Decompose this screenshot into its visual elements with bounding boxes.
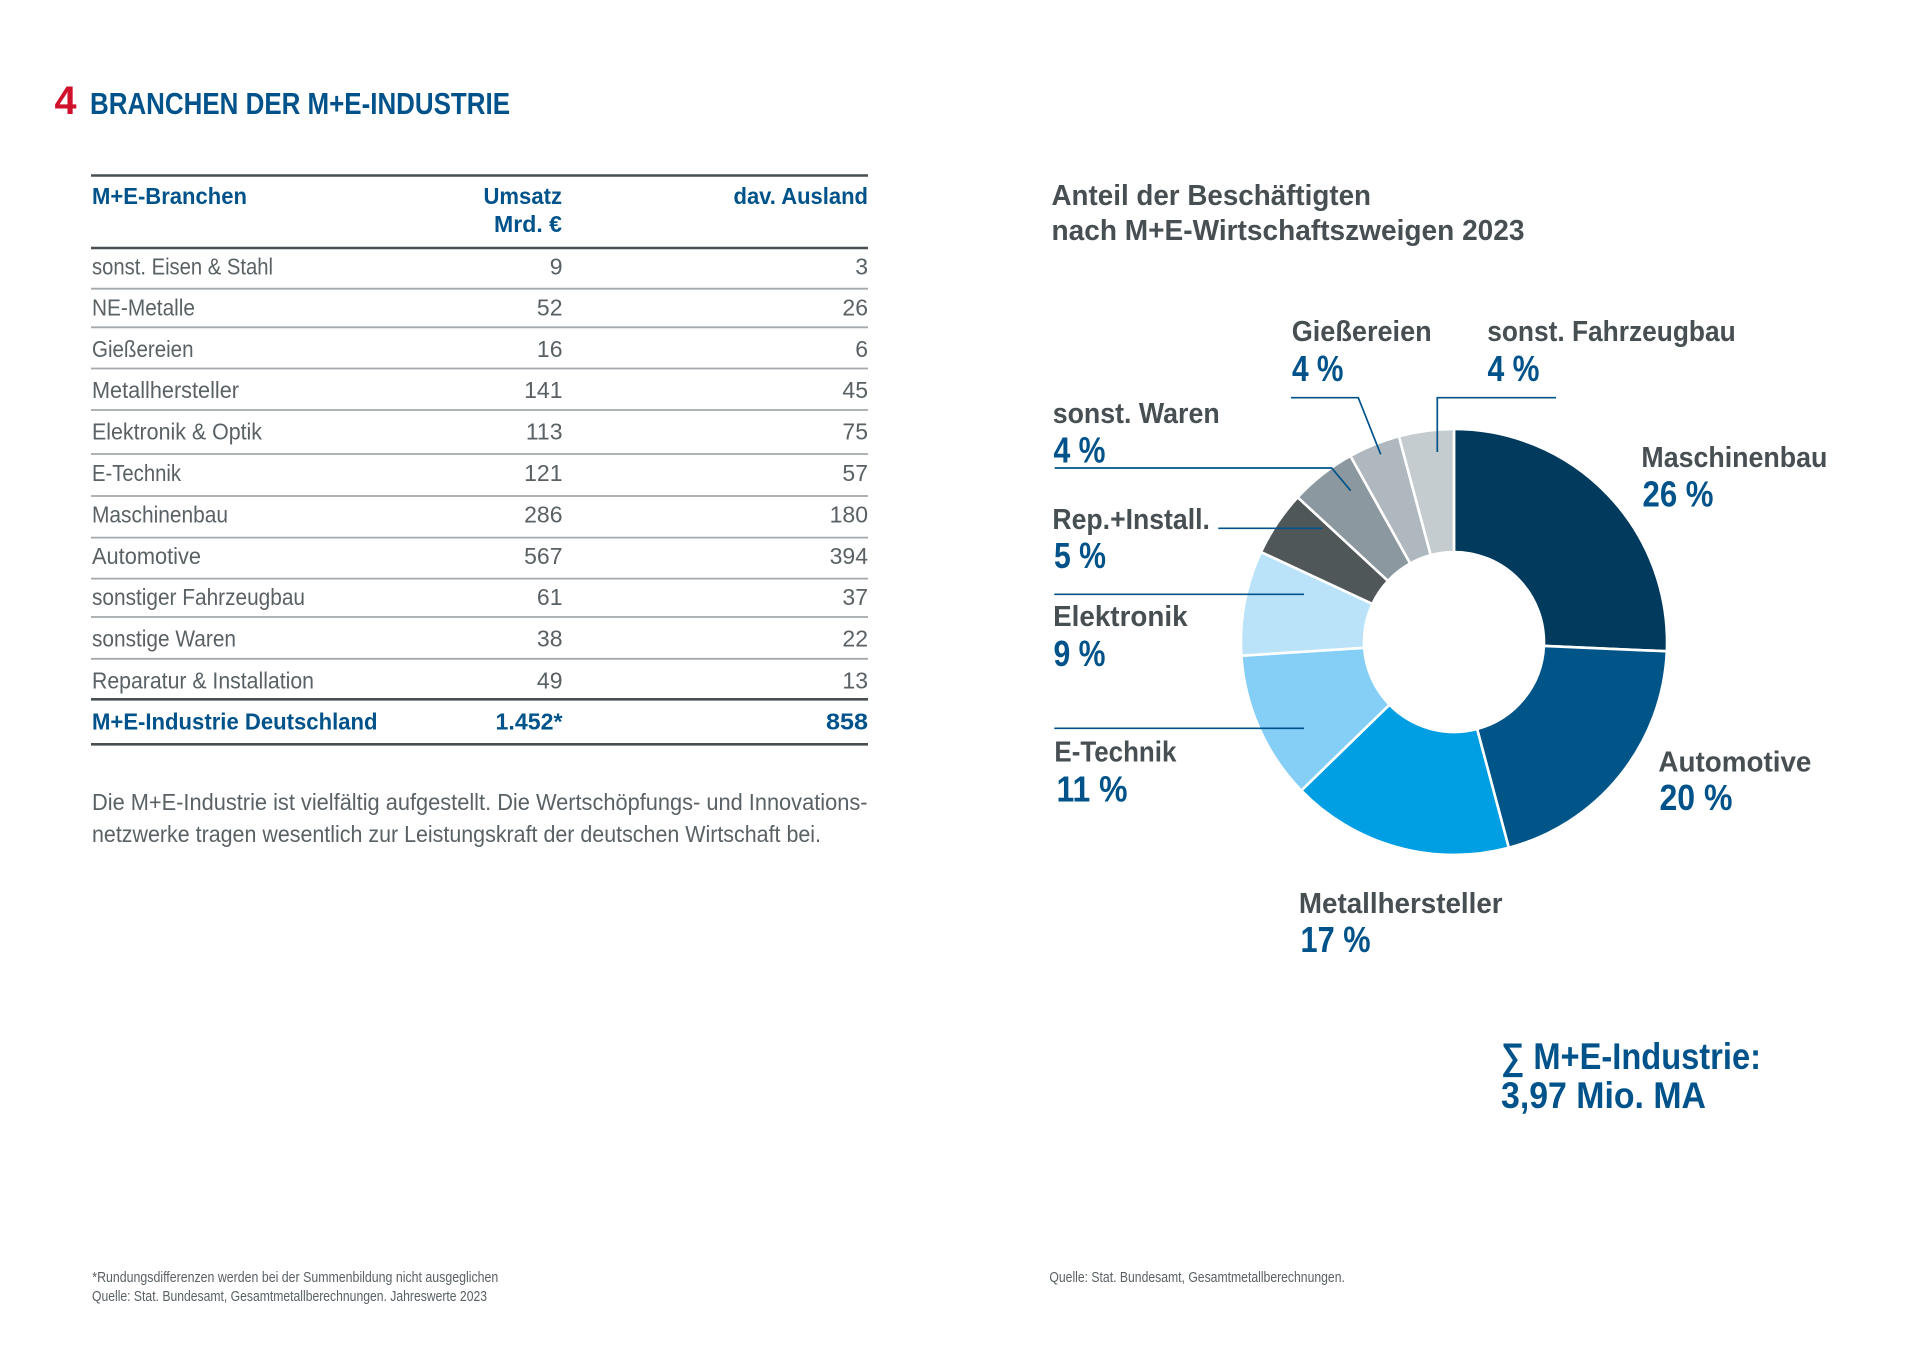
- label: sonst. Waren: 4 %: [1054, 429, 1106, 470]
- label: Metallhersteller: Metallhersteller: [1299, 888, 1503, 920]
- label: sonst. Waren: [1053, 398, 1220, 470]
- heading: BRANCHEN DER M+E-INDUSTRIE: [90, 86, 510, 121]
- label: sonst. Fahrzeugbau: 4 %: [1488, 348, 1540, 389]
- label: Automotive: 20 %: [1660, 777, 1732, 818]
- callout: total employees: ∑ M+E-Industrie:: [1501, 1036, 1761, 1078]
- row: sonstiger Fahrzeugbau: 61: [537, 584, 562, 610]
- slice: sonst. Fahrzeugbau 4 %: [1399, 429, 1454, 555]
- row: total M+E-Industrie Deutschland: 858: [826, 709, 868, 735]
- label: Automotive: [1658, 746, 1811, 818]
- row: Reparatur & Installation: Reparatur & Installation: [92, 668, 314, 694]
- chart heading: [1052, 180, 1524, 247]
- row: sonstige Waren: sonstige Waren: [92, 626, 236, 652]
- row: NE-Metalle: 26: [842, 295, 868, 321]
- row: Metallhersteller: 141: [524, 377, 562, 403]
- row: sonstiger Fahrzeugbau: sonstiger Fahrzeugbau: [92, 584, 305, 610]
- row: Metallhersteller: Metallhersteller: [92, 377, 239, 403]
- row: Metallhersteller: 45: [842, 377, 868, 403]
- row: Elektronik & Optik: [92, 419, 868, 445]
- row: sonstige Waren: 38: [537, 626, 562, 652]
- label: Rep.+Install.: 5 %: [1054, 535, 1106, 576]
- text block: description: Die M+E-Industrie ist vielfältig aufgestellt. Die Wertschöpfungs- und Innovations-: [92, 789, 868, 815]
- row: Maschinenbau: 180: [830, 501, 868, 527]
- table header: dav. Ausland: [734, 183, 868, 209]
- slice: Gießereien 4 %: [1350, 436, 1431, 563]
- label: E-Technik: [1054, 736, 1177, 810]
- row: Automotive: Automotive: [92, 543, 201, 569]
- label: Metallhersteller: 17 %: [1300, 919, 1370, 960]
- row: Automotive: 394: [830, 543, 868, 569]
- slice: Elektronik 9 %: [1241, 552, 1372, 656]
- row: E-Technik: [92, 460, 868, 486]
- row: Gießereien: 16: [537, 336, 562, 362]
- row: sonstiger Fahrzeugbau: [92, 584, 868, 610]
- row: sonstige Waren: [92, 626, 868, 652]
- label: Elektronik: Elektronik: [1053, 601, 1188, 633]
- row: Reparatur & Installation: 49: [537, 668, 562, 694]
- row: Metallhersteller: [92, 377, 868, 403]
- row: Maschinenbau: 286: [524, 501, 562, 527]
- footnote: table source: *Rundungsdifferenzen werden bei der Summenbildung nicht ausgeglichen: [92, 1269, 498, 1286]
- footnote: chart source: Quelle: Stat. Bundesamt, Gesamtmetallberechnungen.: [1049, 1269, 1345, 1286]
- panel: table of M+E sectors: [91, 176, 868, 744]
- row: NE-Metalle: 52: [537, 295, 562, 321]
- label: Gießereien: [1292, 316, 1432, 389]
- row: sonst. Eisen & Stahl: sonst. Eisen & Stahl: [92, 254, 273, 280]
- row: total M+E-Industrie Deutschland: [92, 709, 868, 735]
- label: Elektronik: 9 %: [1054, 633, 1106, 674]
- slice: Maschinenbau 26 %: [1454, 429, 1667, 651]
- label: Gießereien: Gießereien: [1292, 316, 1432, 348]
- footnote: table source: Quelle: Stat. Bundesamt, Gesamtmetallberechnungen. Jahreswerte 2023: [92, 1288, 487, 1305]
- row: Elektronik & Optik: 75: [842, 419, 868, 445]
- label: Maschinenbau: 26 %: [1642, 474, 1714, 514]
- table header: Mrd. €: [494, 211, 562, 237]
- row: Maschinenbau: [92, 501, 868, 527]
- label: Gießereien: 4 %: [1292, 348, 1344, 389]
- row: Gießereien: Gießereien: [92, 336, 194, 362]
- donut chart: [1241, 429, 1667, 855]
- chart heading: Anteil der Beschäftigten: [1052, 180, 1371, 212]
- row: E-Technik: E-Technik: [92, 460, 181, 486]
- table header: Umsatz: [484, 183, 562, 209]
- label: Rep.+Install.: [1052, 504, 1210, 576]
- chart heading: nach M+E-Wirtschaftszweigen 2023: [1052, 215, 1524, 247]
- row: Reparatur & Installation: [92, 668, 868, 694]
- row: E-Technik: 57: [842, 460, 868, 486]
- title: [54, 79, 510, 123]
- label: Maschinenbau: Maschinenbau: [1641, 442, 1827, 474]
- row: NE-Metalle: NE-Metalle: [92, 295, 195, 321]
- row: Gießereien: [92, 336, 868, 362]
- slice: E-Technik 11 %: [1241, 648, 1390, 790]
- row: NE-Metalle: [92, 295, 868, 321]
- callout: total employees: [1501, 1036, 1761, 1116]
- leader lines: [1054, 398, 1556, 728]
- callout: total employees: 3,97 Mio. MA: [1501, 1075, 1706, 1116]
- row: Gießereien: 6: [855, 336, 868, 362]
- label: Maschinenbau: [1641, 442, 1827, 514]
- table header: [92, 183, 868, 237]
- slice: Automotive 20 %: [1477, 646, 1667, 848]
- text block: description: netzwerke tragen wesentlich zur Leistungskraft der deutschen Wirtschaft bei.: [92, 821, 821, 847]
- row: total M+E-Industrie Deutschland: 1.452*: [496, 709, 563, 735]
- row: Maschinenbau: Maschinenbau: [92, 501, 228, 527]
- label: sonst. Fahrzeugbau: sonst. Fahrzeugbau: [1487, 316, 1736, 348]
- label: Rep.+Install.: Rep.+Install.: [1052, 504, 1210, 536]
- row: sonst. Eisen & Stahl: [92, 254, 868, 280]
- row: sonstiger Fahrzeugbau: 37: [842, 584, 868, 610]
- table header: M+E-Branchen: [92, 183, 247, 209]
- slice: Rep.+Install. 5 %: [1261, 497, 1388, 604]
- slice: sonst. Waren 4 %: [1298, 456, 1410, 581]
- label: Metallhersteller: [1299, 888, 1503, 960]
- slice: Metallhersteller 17 %: [1301, 705, 1509, 855]
- row: E-Technik: 121: [524, 460, 562, 486]
- label: E-Technik: E-Technik: [1054, 737, 1177, 769]
- row: Elektronik & Optik: Elektronik & Optik: [92, 419, 262, 445]
- row: Automotive: 567: [524, 543, 562, 569]
- row: Elektronik & Optik: 113: [526, 419, 562, 445]
- label: sonst. Waren: sonst. Waren: [1053, 398, 1220, 430]
- row: sonst. Eisen & Stahl: 3: [855, 254, 868, 280]
- chapter number: 4: [54, 79, 77, 123]
- row: Reparatur & Installation: 13: [842, 668, 868, 694]
- row: sonstige Waren: 22: [842, 626, 868, 652]
- label: E-Technik: 11 %: [1056, 769, 1128, 810]
- row: total M+E-Industrie Deutschland: M+E-Industrie Deutschland: [92, 709, 378, 735]
- row: Automotive: [92, 543, 868, 569]
- label: sonst. Fahrzeugbau: [1487, 316, 1736, 389]
- label: Elektronik: [1053, 601, 1188, 674]
- text block: description: [92, 789, 868, 847]
- footnote: table source: [92, 1269, 498, 1305]
- row: sonst. Eisen & Stahl: 9: [550, 254, 562, 280]
- label: Automotive: Automotive: [1658, 746, 1811, 778]
